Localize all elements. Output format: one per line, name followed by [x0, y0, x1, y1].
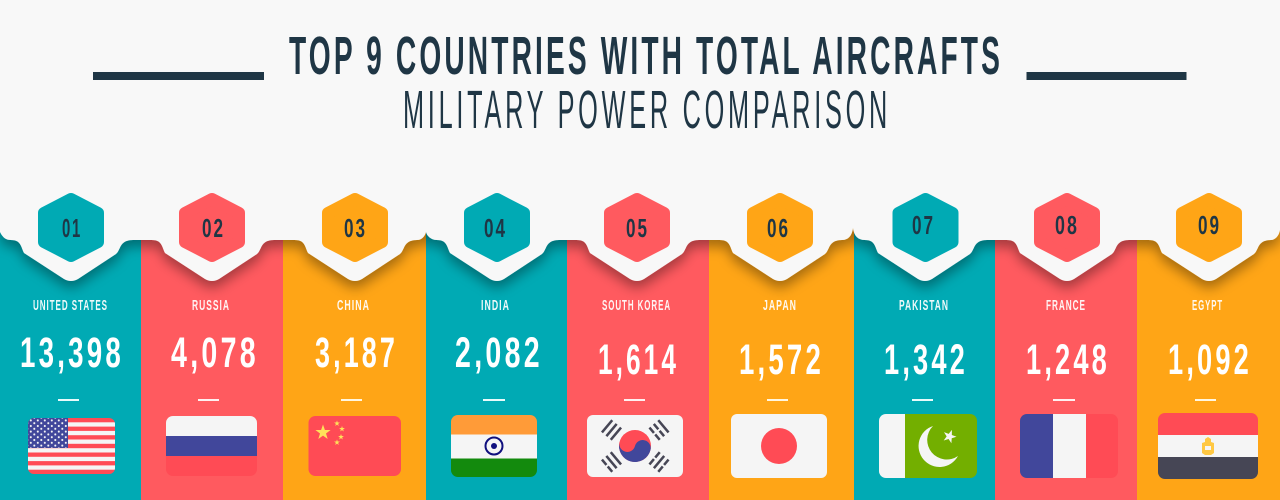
dash	[198, 399, 219, 401]
country name: PAKISTAN	[899, 298, 949, 314]
dash	[341, 399, 362, 401]
aircraft count: 1,572	[739, 336, 824, 384]
flag: United States	[28, 418, 115, 474]
aircraft count: 2,082	[455, 329, 543, 377]
flag: Pakistan	[879, 414, 977, 478]
rank hexagon 05	[610, 199, 664, 256]
country name: EGYPT	[1192, 298, 1223, 314]
aircraft count: 4,078	[171, 329, 259, 377]
flag: France	[1020, 414, 1118, 478]
dash	[1053, 399, 1075, 401]
country name: JAPAN	[763, 298, 797, 314]
rank hexagon 01	[44, 199, 98, 256]
rank number 08: 08	[1055, 210, 1079, 240]
country name: INDIA	[481, 298, 510, 314]
rank hexagon 08	[1040, 199, 1094, 256]
rank hexagon 07	[898, 199, 952, 256]
country: France	[1020, 199, 1118, 478]
left title rule	[93, 72, 264, 80]
dash	[767, 399, 788, 401]
rank hexagon 04	[470, 199, 524, 256]
country: South Korea	[587, 199, 683, 477]
country: Japan	[731, 199, 827, 478]
country: Pakistan	[879, 199, 977, 478]
country: Russia	[166, 199, 259, 476]
dash	[624, 399, 645, 401]
rank hexagon 03	[328, 199, 382, 256]
wavy header edge with hexagon notches	[0, 0, 1280, 281]
dash	[483, 399, 505, 401]
rank number 01: 01	[62, 213, 82, 243]
rank number 09: 09	[1198, 210, 1221, 240]
country: China	[308, 199, 401, 476]
aircraft count: 1,248	[1026, 336, 1110, 384]
country name: SOUTH KOREA	[602, 298, 671, 314]
rank hexagon 06	[753, 199, 807, 256]
rank number 04: 04	[484, 213, 507, 243]
aircraft count: 13,398	[20, 329, 124, 377]
country: United States	[20, 199, 124, 474]
rank hexagon 02	[185, 199, 239, 256]
coloured column panels	[0, 200, 1280, 500]
country name: RUSSIA	[192, 298, 230, 314]
right title rule	[1026, 72, 1186, 80]
flag: India	[451, 415, 537, 477]
country: Egypt	[1158, 199, 1258, 479]
country name: CHINA	[337, 298, 370, 314]
rank number 02: 02	[202, 213, 225, 243]
rank number 03: 03	[344, 213, 367, 243]
rank hexagon 09	[1182, 199, 1236, 256]
aircraft count: 1,342	[884, 336, 968, 384]
flag: Egypt	[1158, 413, 1258, 479]
aircraft count: 1,614	[598, 336, 679, 384]
dash	[1195, 399, 1216, 401]
flag: Japan	[731, 414, 827, 478]
country: India	[451, 199, 543, 477]
aircraft count: 3,187	[315, 329, 398, 377]
rank number 05: 05	[626, 213, 649, 243]
dash	[58, 399, 79, 401]
rank number 07: 07	[912, 210, 935, 240]
dash	[912, 399, 933, 401]
flag: Russia	[166, 416, 257, 476]
rank number 06: 06	[767, 213, 790, 243]
flag: China	[308, 416, 401, 476]
country name: FRANCE	[1046, 298, 1086, 314]
country name: UNITED STATES	[33, 298, 108, 314]
flag: South Korea	[587, 415, 683, 477]
